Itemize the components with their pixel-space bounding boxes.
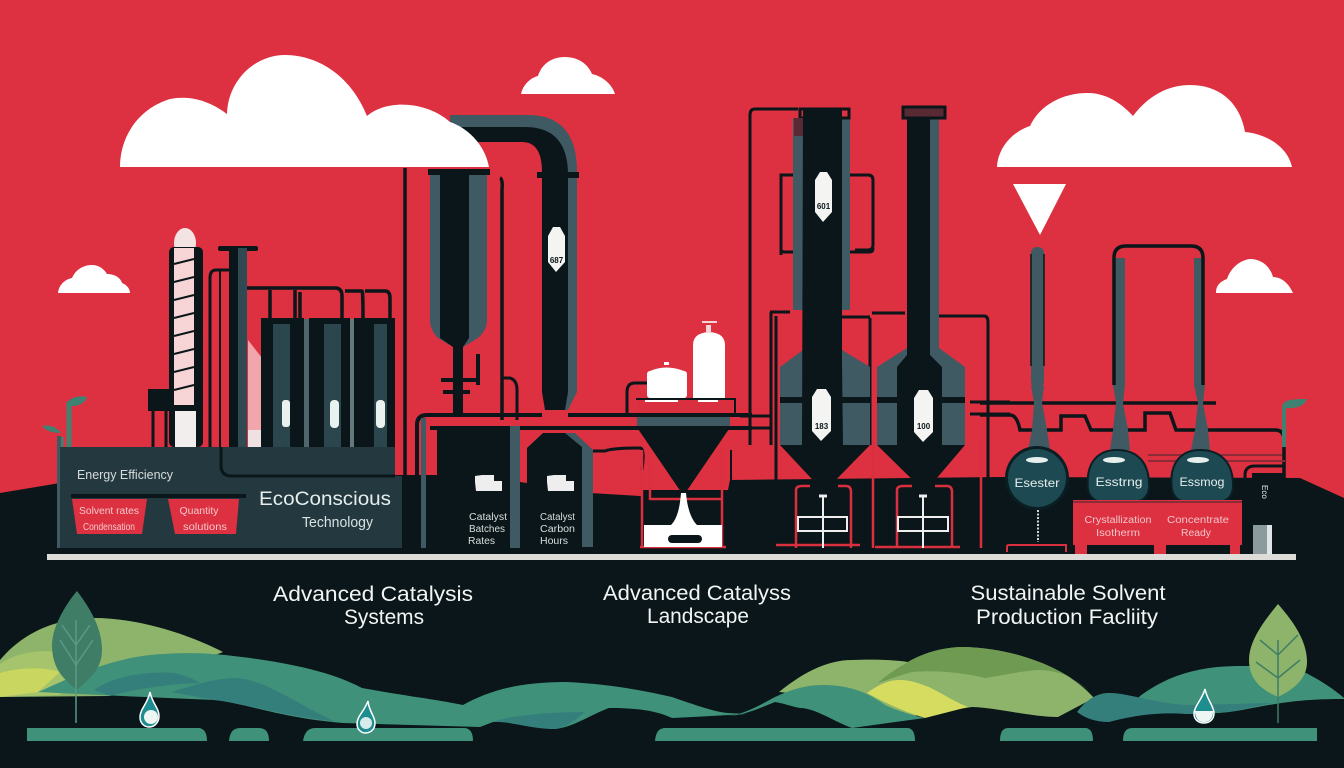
section titles bbox=[273, 582, 1166, 629]
landscape hills bbox=[0, 618, 1344, 729]
flask 1 stem bbox=[1037, 510, 1039, 542]
white tanks on red table bbox=[627, 321, 735, 415]
flask necks bbox=[1028, 385, 1210, 450]
overhead tubes bbox=[1031, 246, 1204, 387]
valve assembly B bbox=[873, 440, 981, 548]
cloud: large left, in front of the overhead pipe bbox=[120, 55, 489, 167]
chimney and pipes bbox=[210, 246, 390, 447]
distillation tower bbox=[148, 228, 203, 447]
title: advanced catalysis landscape: Landscape bbox=[647, 605, 749, 628]
leaf: left tree bbox=[52, 591, 102, 723]
water drop right bbox=[1194, 689, 1214, 723]
title: advanced catalysis systems: Advanced Catalysis bbox=[273, 583, 473, 606]
label: eco-conscious technology: Technology bbox=[302, 514, 373, 531]
hill: left mid green band bbox=[0, 651, 75, 697]
water drop centre bbox=[357, 701, 375, 733]
hill: deep teal centre patch bbox=[171, 678, 334, 721]
capsule upper: 601: 601 bbox=[817, 202, 831, 211]
cloud: small left bbox=[58, 265, 130, 293]
base tank 2 icon and text bbox=[540, 475, 575, 547]
base tank 1 icon and text: Batches bbox=[469, 524, 505, 535]
flask 1: Esester bbox=[1014, 476, 1060, 490]
capsule 687 bbox=[548, 227, 565, 272]
pipes behind columns bbox=[740, 109, 1010, 548]
leaf: right tree bbox=[1249, 604, 1307, 723]
red table with labels: Concentrate bbox=[1167, 515, 1229, 526]
capsule lower: 100 bbox=[914, 390, 933, 442]
base tanks bbox=[421, 418, 643, 548]
red table with labels bbox=[1073, 500, 1242, 555]
overhead pipe bbox=[450, 115, 579, 410]
flask 2 bbox=[1088, 450, 1149, 501]
red badge 1: Condensation bbox=[83, 522, 135, 533]
hill: deep teal small bbox=[493, 712, 585, 729]
right section: three flask reactors bbox=[980, 246, 1307, 555]
ground silhouette bbox=[0, 475, 1344, 768]
sprout: right small leaf bbox=[1282, 399, 1307, 447]
process pipes bbox=[980, 403, 1284, 490]
flask 2: Esstrng bbox=[1096, 475, 1142, 489]
control box: Eco bbox=[1260, 485, 1269, 499]
water drop left bbox=[140, 692, 159, 727]
red badge 2: Quantity bbox=[180, 506, 218, 517]
base tank 1 icon and text: Catalyst bbox=[469, 512, 507, 523]
capsule 687: 687 bbox=[550, 256, 564, 265]
title: advanced catalysis landscape bbox=[603, 582, 791, 628]
red badge 2: solutions bbox=[183, 522, 227, 533]
red tray bottom left bbox=[1007, 545, 1066, 552]
clouds bbox=[58, 57, 1293, 293]
control box bbox=[1245, 466, 1284, 555]
red badge 1 bbox=[72, 499, 147, 534]
hill: left yellow green bbox=[0, 668, 60, 697]
base tank 2 icon and text: Catalyst bbox=[540, 512, 575, 523]
hill: green right darker top bbox=[878, 647, 1090, 692]
title: sustainable solvent production facility bbox=[970, 582, 1166, 629]
long pipes bbox=[405, 168, 502, 548]
red table with labels: Crystallization bbox=[1084, 515, 1152, 526]
side pipes bbox=[1148, 455, 1285, 461]
reactor vessel 1 bbox=[428, 169, 517, 420]
title: advanced catalysis systems: Systems bbox=[344, 606, 424, 629]
base tank 2 icon and text: Carbon bbox=[540, 524, 575, 535]
column A bbox=[780, 108, 870, 492]
hill: teal long bbox=[38, 653, 747, 729]
capsule lower: 183: 183 bbox=[815, 422, 829, 431]
capsule upper: 601 bbox=[815, 172, 832, 222]
red table with labels: Isotherm bbox=[1096, 528, 1140, 539]
flask 3: Essmog bbox=[1180, 475, 1224, 489]
valve assembly A bbox=[776, 486, 860, 548]
marker: white triangle bbox=[1013, 184, 1066, 235]
hill: deep teal left patch bbox=[94, 673, 200, 696]
flask 1 bbox=[1005, 446, 1069, 510]
capsule lower: 183 bbox=[812, 389, 831, 441]
three storage tanks bbox=[261, 318, 395, 447]
title: advanced catalysis systems bbox=[273, 583, 473, 629]
capsule lower: 100: 100 bbox=[917, 422, 931, 431]
cloud: small right bbox=[1216, 259, 1293, 293]
funnel stand and basin bbox=[640, 450, 731, 548]
flask 3 bbox=[1171, 450, 1233, 501]
hill: teal far right bbox=[1139, 666, 1344, 714]
tall twin columns section bbox=[740, 107, 1010, 548]
title: advanced catalysis landscape: Advanced Catalyss bbox=[603, 582, 791, 605]
hill: yellow bbox=[867, 680, 968, 718]
bottom bars bbox=[27, 728, 1317, 741]
left section: energy efficiency unit bbox=[42, 228, 402, 548]
base tank 1 icon and text bbox=[468, 475, 507, 547]
label: eco-conscious technology: EcoConscious bbox=[259, 489, 391, 510]
funnel reactor bbox=[636, 417, 731, 492]
hill: light green left bbox=[0, 618, 223, 697]
red badge 2 bbox=[168, 499, 239, 534]
title: sustainable solvent production facility: Sustainable Solvent bbox=[970, 582, 1166, 605]
hill: deep teal far right bbox=[1077, 693, 1272, 722]
column B bbox=[877, 107, 965, 492]
sprout: left small leaf bbox=[42, 396, 87, 548]
cloud: small top centre bbox=[521, 57, 615, 94]
hill: green right back bbox=[779, 647, 1094, 718]
red badge 1: Solvent rates bbox=[79, 506, 139, 517]
platform line bbox=[47, 554, 1296, 560]
title: sustainable solvent production facility: Production Facliity bbox=[976, 606, 1159, 629]
control panel body bbox=[60, 447, 402, 548]
red table with labels: Ready bbox=[1181, 528, 1211, 539]
tank gauges bbox=[282, 400, 385, 428]
base tank 1 icon and text: Rates bbox=[468, 536, 495, 547]
base tank 2 icon and text: Hours bbox=[540, 536, 568, 547]
hill: teal front right bbox=[728, 685, 925, 728]
cloud: large right bbox=[997, 85, 1292, 167]
label: eco-conscious technology bbox=[259, 489, 391, 531]
central section: catalysis reactors bbox=[405, 115, 752, 548]
label: energy efficiency: Energy Efficiency bbox=[77, 467, 173, 482]
